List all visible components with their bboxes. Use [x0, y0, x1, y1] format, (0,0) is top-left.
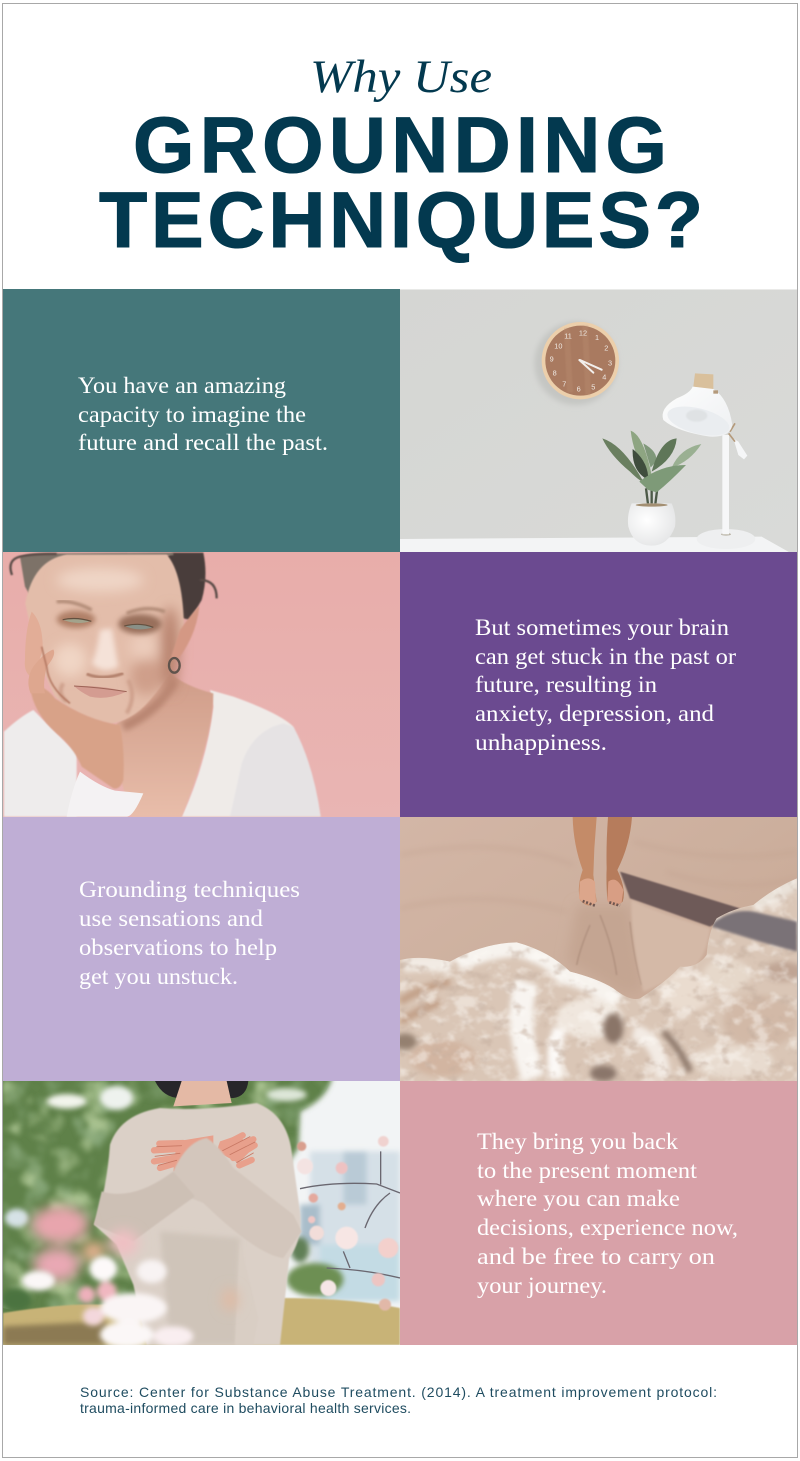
- source citation: [80, 1384, 717, 1416]
- plant: [602, 431, 701, 507]
- panel: purple text block: unhappiness.: [475, 730, 607, 755]
- panel: purple text block: can get stuck in the past or: [475, 644, 736, 669]
- neck and chest: [117, 673, 213, 817]
- hair: [10, 553, 217, 620]
- wall clock: 5: [591, 382, 595, 391]
- hand on cheek: [25, 612, 124, 789]
- panel: lavender text block: [3, 817, 400, 1081]
- wall clock: 6: [577, 385, 581, 394]
- panel: pink text block: where you can make: [477, 1186, 680, 1211]
- panel: purple text block: But sometimes your brain: [475, 615, 730, 640]
- wall clock: 10: [554, 341, 562, 350]
- panel: pink text block: decisions, experience now,: [477, 1215, 738, 1240]
- source citation: Source: Center for Substance Abuse Treatment. (2014). A treatment improvement protocol:: [80, 1384, 717, 1400]
- blossoms foreground: [32, 1206, 238, 1311]
- panel: teal text block: future and recall the past.: [78, 430, 328, 455]
- wall clock: 9: [550, 354, 554, 363]
- panel: teal text block: capacity to imagine the: [78, 402, 306, 427]
- panel: purple text block: future, resulting in: [475, 672, 658, 697]
- ground: [3, 1298, 400, 1345]
- wall clock: 12: [579, 329, 587, 338]
- panel: pink text block: to the present moment: [477, 1158, 698, 1183]
- panel: purple text block: anxiety, depression, and: [475, 701, 715, 726]
- photo: bare feet on sand with sea foam: [393, 817, 800, 1082]
- title: [99, 51, 703, 264]
- cuff: [67, 772, 143, 817]
- wall clock: 3: [608, 358, 612, 367]
- title line: Techniques?: TECHNIQUES?: [99, 175, 703, 264]
- wet sand trail: [572, 907, 635, 986]
- mouth: [74, 686, 127, 698]
- wall clock: 7: [562, 379, 566, 388]
- tree background: [0, 1071, 333, 1345]
- table top: [400, 537, 790, 553]
- shrubs: [2, 1237, 343, 1311]
- panel: pink text block: your journey.: [477, 1273, 607, 1298]
- title line: Why Use: Why Use: [310, 51, 492, 103]
- panel: lavender text block: observations to help: [79, 935, 277, 960]
- sea foam: [393, 875, 800, 1082]
- desk lamp: [663, 373, 755, 549]
- crossed hands: [154, 1135, 255, 1171]
- wall clock: 4: [602, 372, 606, 381]
- wall clock: [534, 322, 619, 405]
- face: [25, 555, 184, 724]
- eyes and brows: [57, 601, 165, 634]
- panel: lavender text block: Grounding techniques: [79, 877, 300, 902]
- photo: clock, plant and lamp on white table: [400, 289, 797, 553]
- crossed sweater arms: [173, 1138, 302, 1258]
- white pot: [628, 503, 675, 546]
- panel: pink text block: [400, 1081, 797, 1345]
- cherry branch right side: [297, 1136, 400, 1311]
- panel: pink text block: and be free to carry on: [477, 1244, 716, 1269]
- panel: teal text block: [3, 289, 400, 552]
- sweater: [94, 1103, 301, 1345]
- shirt: [4, 690, 321, 817]
- photo: thoughtful woman against pink wall: [3, 552, 400, 817]
- city buildings background: [300, 1151, 400, 1301]
- wall clock: 2: [604, 344, 608, 353]
- dark hair and neck: [155, 1081, 248, 1098]
- panel: pink text block: They bring you back: [477, 1129, 679, 1154]
- ear: [170, 607, 199, 660]
- wall clock: 8: [553, 369, 557, 378]
- title line: Grounding: GROUNDING: [133, 100, 667, 189]
- wall clock: 11: [564, 332, 572, 341]
- panel: lavender text block: get you unstuck.: [79, 964, 238, 989]
- legs and feet: [573, 817, 632, 906]
- wall clock: 1: [595, 333, 599, 342]
- panel: lavender text block: use sensations and: [79, 906, 264, 931]
- photo: person with crossed hands on chest among blossoms: [0, 1071, 400, 1348]
- panel: purple text block: [400, 552, 797, 817]
- earring: [169, 658, 180, 673]
- shadow of legs: [620, 872, 740, 927]
- panel: teal text block: You have an amazing: [78, 373, 287, 398]
- source citation: trauma-informed care in behavioral health services.: [80, 1400, 411, 1416]
